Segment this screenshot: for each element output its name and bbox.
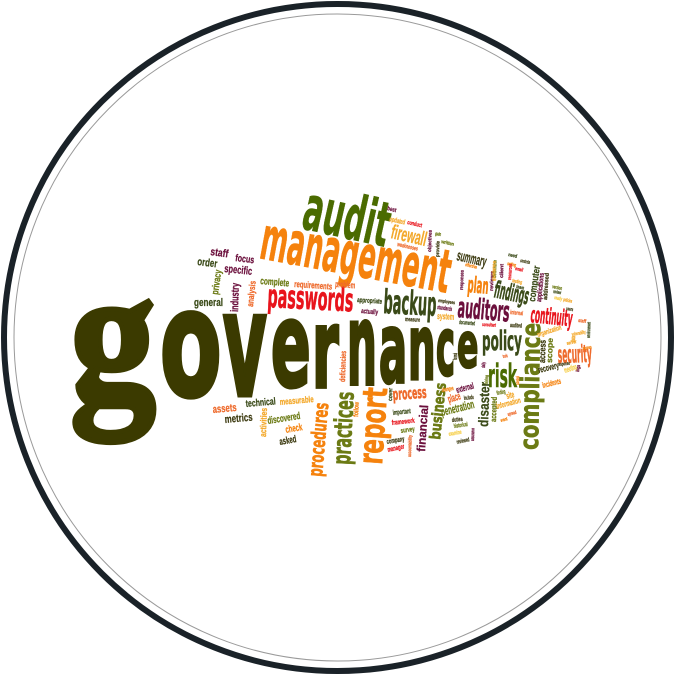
- upper center word group: appropriate: [357, 297, 382, 306]
- left word group: industry: [229, 282, 242, 312]
- center lower word group: spread: [507, 410, 517, 418]
- left word group: [194, 246, 356, 312]
- lower left word group: check: [285, 422, 304, 436]
- right word group: response: [558, 361, 570, 368]
- word cloud: formal: [453, 353, 459, 360]
- center lower word group: changes: [441, 386, 454, 394]
- center lower word group: place: [446, 390, 462, 406]
- upper center word group: determine: [492, 260, 499, 278]
- right word group: users: [566, 306, 574, 313]
- upper center word group: weaknesses: [396, 242, 419, 253]
- left word group: focus: [235, 253, 255, 266]
- word: procedures: procedures: [303, 402, 333, 477]
- upper center word group: internal: [510, 310, 524, 317]
- center lower word group: hiring: [484, 375, 490, 384]
- left word group: privacy: [210, 269, 224, 295]
- lower left word group: activities: [258, 408, 269, 437]
- right word group: team: [516, 284, 525, 292]
- word cloud: policy: [482, 326, 522, 357]
- lower left word group: metrics: [224, 412, 253, 426]
- upper center word group: updated: [389, 216, 406, 227]
- word cloud: findings: [492, 277, 531, 310]
- word: business: business: [426, 382, 450, 440]
- center lower word group: control: [515, 376, 521, 385]
- center lower word group: event: [500, 416, 508, 424]
- word cloud: plan: [466, 273, 490, 300]
- right word group: access: [582, 344, 592, 352]
- upper center word group: documented: [459, 320, 475, 327]
- word: governance: e: [457, 309, 478, 382]
- word: report: report: [351, 386, 396, 466]
- right word group: applications: [536, 273, 546, 302]
- right word group: staff: [578, 318, 587, 325]
- upper center word group: consultant: [482, 322, 496, 329]
- center lower word group: site: [505, 389, 515, 401]
- center lower word group: important: [392, 408, 411, 417]
- word: governance: r: [312, 285, 338, 413]
- word: governance: n: [408, 296, 435, 401]
- right word group: data: [571, 336, 577, 342]
- word: governance: a: [379, 292, 407, 405]
- upper center word group: effective: [465, 262, 478, 271]
- lower left word group: measurable: [279, 394, 314, 407]
- right word group: guidance: [491, 261, 498, 281]
- center lower word group: survey: [400, 426, 415, 435]
- center lower word group: tools: [502, 353, 508, 360]
- left word group: order: [197, 256, 218, 270]
- left word group: analysis: [245, 280, 258, 307]
- upper center word group: standards: [437, 305, 453, 313]
- word cloud: backup: [383, 282, 438, 324]
- upper center word group: [357, 206, 524, 330]
- left word group: specific: [224, 263, 253, 278]
- center lower word group: framework: [391, 418, 415, 427]
- upper center word group: provide: [435, 241, 442, 257]
- right word group: ready: [554, 295, 563, 303]
- upper center word group: written: [440, 239, 455, 248]
- center lower word group: daily: [481, 362, 487, 368]
- center lower word group: examine: [448, 430, 463, 438]
- word: firewall: firewall: [389, 221, 429, 251]
- right word group: [491, 252, 593, 390]
- lower left word group: asked: [279, 434, 297, 448]
- left word group: complete: [260, 276, 290, 290]
- word cloud: summary: [455, 247, 488, 271]
- word: financial: financial: [414, 404, 431, 452]
- right word group: environment: [586, 322, 593, 338]
- right word group: controls: [520, 258, 531, 266]
- word: governance: o: [160, 259, 222, 430]
- upper center word group: employees: [438, 298, 456, 306]
- upper center word group: responses: [459, 270, 466, 290]
- word: penetration: penetration: [439, 397, 476, 419]
- right word group: addressed: [543, 272, 551, 300]
- word: governance: e: [271, 277, 311, 414]
- upper center word group: gain: [435, 231, 442, 238]
- right word group: testing: [512, 278, 523, 286]
- left word group: problem: [335, 279, 356, 290]
- word: governance: c: [436, 301, 455, 394]
- center lower word group: accountability: [407, 435, 414, 457]
- left word group: requirements: [294, 279, 332, 292]
- word: audit: audit: [297, 171, 398, 262]
- center lower word group: [386, 353, 522, 457]
- center lower word group: accepted: [489, 397, 499, 422]
- lower left word group: [212, 350, 394, 448]
- right word group: review: [553, 289, 562, 296]
- right word group: setting: [507, 261, 517, 269]
- upper center word group: audited: [510, 323, 522, 330]
- left word group: general: [194, 297, 223, 309]
- upper center word group: system: [437, 311, 454, 322]
- word cloud: security: [557, 340, 592, 369]
- word cloud: passwords: [267, 277, 354, 319]
- right word group: server: [566, 339, 577, 347]
- lower left word group: follow: [353, 401, 361, 417]
- lower left word group: assets: [212, 402, 237, 416]
- center lower word group: historical: [453, 422, 468, 430]
- lower left word group: cover: [388, 387, 394, 401]
- center lower word group: company: [386, 436, 405, 446]
- upper center word group: objectives: [427, 230, 434, 252]
- center lower word group: reviewed: [456, 437, 470, 446]
- word: governance: g: [70, 228, 156, 442]
- right word group: resources: [507, 264, 514, 280]
- upper center word group: actually: [361, 308, 378, 316]
- lower left word group: deficiencies: [338, 350, 348, 382]
- center lower word group: include: [464, 395, 474, 402]
- upper center word group: measure: [405, 317, 421, 324]
- lower left word group: discovered: [267, 411, 301, 427]
- word: governance: v: [222, 261, 266, 429]
- right word group: access: [537, 340, 548, 363]
- right word group: version: [552, 284, 563, 292]
- upper center word group: reviews: [489, 271, 496, 291]
- center lower word group: assurance: [470, 428, 476, 441]
- word: disaster: disaster: [475, 381, 493, 427]
- center lower word group: duties: [452, 417, 464, 424]
- right word group: scope: [545, 337, 555, 363]
- word cloud: auditors: [456, 291, 511, 329]
- word: compliance: compliance: [515, 323, 547, 450]
- upper center word group: conduct: [407, 220, 423, 229]
- word cloud: risk: [488, 357, 517, 395]
- word cloud: continuity: [529, 303, 574, 332]
- center lower word group: finding: [496, 389, 506, 397]
- right word group: computer: [527, 265, 543, 302]
- right word group: recovery: [537, 360, 560, 375]
- right word group: email: [515, 266, 524, 274]
- right word group: need: [508, 252, 518, 260]
- right word group: meeting: [563, 362, 578, 375]
- right word group: policies: [563, 297, 573, 305]
- center lower word group: information: [495, 396, 522, 411]
- word cloud: process: [392, 383, 427, 404]
- word: practices: practices: [327, 391, 360, 465]
- center lower word group: manager: [387, 444, 405, 454]
- right word group: client: [499, 264, 505, 278]
- right word group: logs: [575, 364, 582, 372]
- right word group: incidents: [541, 377, 562, 390]
- upper center word group: best: [387, 206, 397, 214]
- center lower word group: external: [455, 381, 475, 395]
- right word group: vulnerability: [571, 330, 586, 338]
- lower left word group: technical: [245, 396, 276, 410]
- left word group: staff: [210, 246, 229, 261]
- word: governance: n: [347, 281, 377, 411]
- right word group: organization: [536, 325, 562, 339]
